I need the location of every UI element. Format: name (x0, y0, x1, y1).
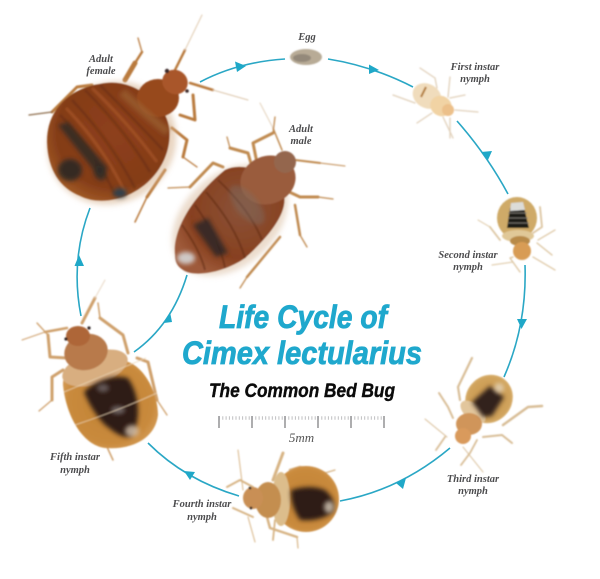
label: egg: Egg (297, 32, 316, 43)
label: first instar nymph (450, 62, 500, 85)
label: third instar nymph: nymph (458, 486, 488, 497)
label: first instar nymph: nymph (460, 74, 490, 85)
label: adult male (288, 124, 314, 147)
label: fourth instar nymph: nymph (187, 512, 217, 523)
scale bar (219, 416, 384, 445)
label: adult male: Adult (288, 124, 314, 135)
label: adult male: male (290, 136, 312, 147)
cycle arrow: fourth to fifth instar (148, 443, 239, 496)
cycle arrow: adult male to fifth instar (134, 275, 187, 352)
label: fourth instar nymph (172, 499, 232, 523)
label: adult female: female (86, 66, 116, 77)
cycle arrow: third to fourth instar (340, 448, 450, 501)
label: adult female (86, 54, 116, 77)
label: second instar nymph: nymph (453, 262, 483, 273)
title: Life Cycle of (219, 299, 390, 335)
cycle arrow: second to third instar (504, 265, 527, 377)
cycle arrow: adult female to egg (200, 59, 285, 82)
bug: first instar nymph (393, 68, 478, 138)
cycle arrow: fifth instar to adult female (74, 208, 90, 316)
bug: adult female (24, 15, 248, 229)
bug: fourth instar nymph (227, 450, 339, 548)
egg (290, 49, 322, 65)
label: fifth instar nymph: nymph (60, 465, 90, 476)
label: fifth instar nymph: Fifth instar (49, 452, 101, 463)
label: third instar nymph (447, 474, 500, 497)
cycle arrow: first to second instar (457, 121, 508, 194)
label: first instar nymph: First instar (450, 62, 500, 73)
title: Cimex lectularius (182, 335, 422, 371)
title (182, 299, 422, 371)
bug: second instar nymph (478, 197, 555, 272)
bug: fifth instar nymph (22, 280, 167, 460)
bug: third instar nymph (425, 358, 542, 472)
label: fifth instar nymph (49, 452, 101, 476)
cycle arrow: egg to first instar (328, 59, 413, 87)
scale label: 5mm (289, 430, 314, 445)
label: fourth instar nymph: Fourth instar (172, 499, 232, 510)
bug: adult male (150, 103, 345, 298)
label: second instar nymph (438, 250, 499, 273)
label: adult female: Adult (88, 54, 114, 65)
label: second instar nymph: Second instar (438, 250, 499, 261)
label: third instar nymph: Third instar (447, 474, 500, 485)
subtitle: The Common Bed Bug (209, 381, 395, 402)
